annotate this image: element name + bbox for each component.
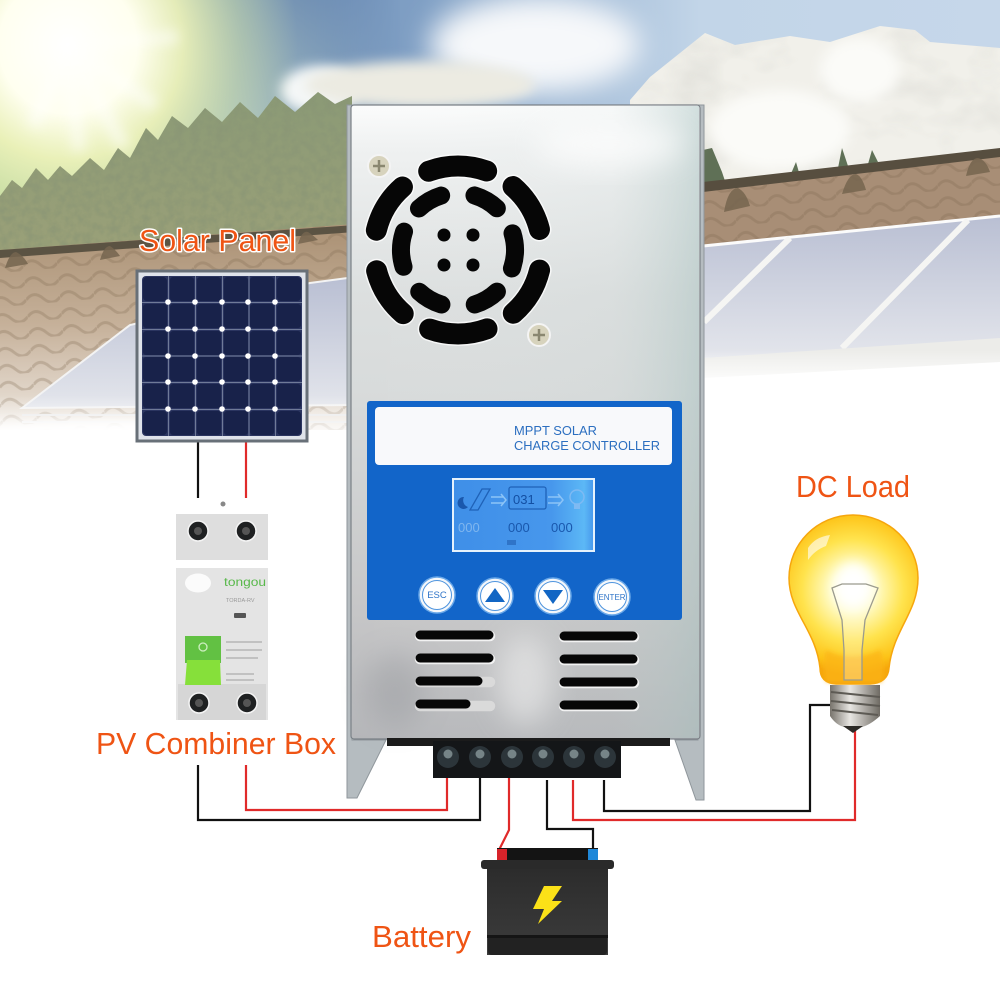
blue control panel: [367, 401, 682, 620]
PV combiner box / breaker: tongou: [224, 575, 266, 589]
icon: lightning bolt: [533, 886, 562, 924]
wiring: [198, 441, 855, 850]
LCD display: 000: [508, 520, 530, 535]
solar panel: [137, 271, 307, 441]
fan grille: [350, 142, 566, 358]
button: down: [535, 578, 571, 614]
product label: [375, 407, 672, 465]
label: DC Load: DC Load: [796, 469, 910, 504]
PV combiner box / breaker: [176, 502, 268, 720]
button: ENTER: [594, 579, 630, 615]
LCD display: [453, 479, 594, 551]
button: ESC: ESC: [427, 590, 447, 601]
label: Solar Panel: Solar Panel: [139, 223, 296, 258]
icon: light bulb: [789, 515, 918, 733]
label: PV Combiner Box: PV Combiner Box: [96, 726, 336, 761]
controller housing: [351, 105, 700, 739]
product label: MPPT SOLAR: [514, 424, 597, 438]
side flanges of the controller: [347, 105, 704, 800]
background: rooftop scene with sun, forest and mountains: [0, 0, 1000, 430]
lower ventilation slots: [420, 635, 634, 706]
label: Battery: Battery: [372, 919, 471, 954]
button: up: [477, 578, 513, 614]
LCD display: 000: [458, 520, 480, 535]
PV combiner box / breaker: TORDA-RV: [226, 598, 255, 604]
screws on housing: [368, 155, 550, 346]
button: ESC: [419, 577, 455, 613]
LCD display: 031: [513, 492, 535, 507]
button: ENTER: ENTER: [598, 593, 626, 602]
LCD display: 000: [551, 520, 573, 535]
product label: CHARGE CONTROLLER: [514, 439, 660, 453]
icon: car battery: [481, 848, 614, 955]
terminal block: [387, 738, 670, 778]
